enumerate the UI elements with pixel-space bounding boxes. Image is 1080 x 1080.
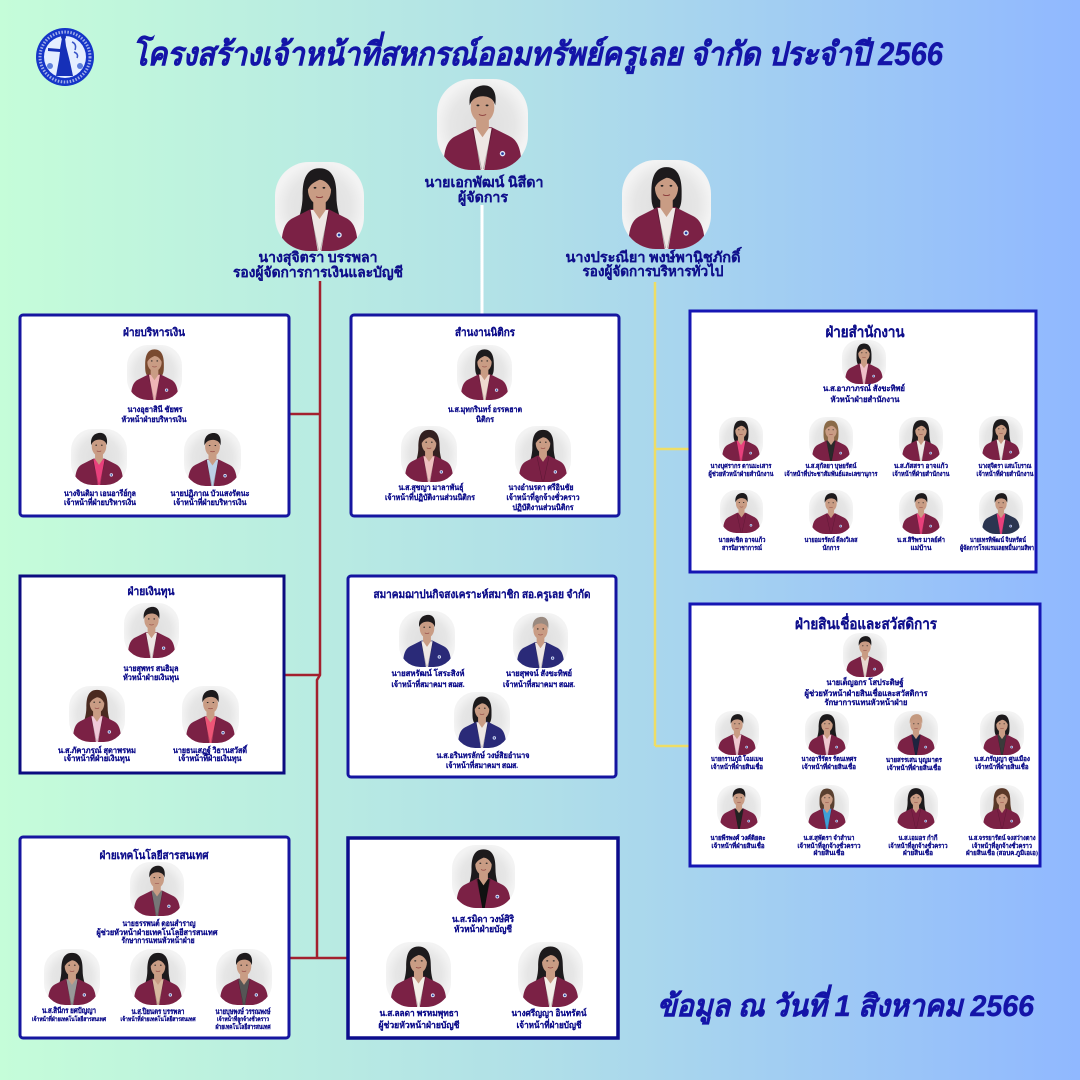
role: office head: หัวหน้าฝ่ายสำนักงาน [830, 394, 900, 404]
name and role: credit staff 7: น.ส.เอมอร กำกี [898, 834, 938, 842]
name and role: office staff 5: สารนิยาชาการณ์ [722, 544, 762, 552]
panel: legal office [351, 315, 619, 516]
name and role: credit staff 7: เจ้าหน้าที่ลูกจ้างชั่วคราว [888, 840, 948, 851]
date note: ข้อมูล ณ วันที่ 1 สิงหาคม 2566 [657, 984, 1034, 1025]
name and role: office staff 1 [708, 463, 774, 479]
portrait: credit staff 7 [894, 785, 938, 829]
person: deputy manager general administration: นางประณียา พงษ์พานิชภักดิ์ [566, 246, 742, 266]
name and role: credit staff 6: ฝ่ายสินเชื่อ [814, 847, 845, 857]
portrait: deputy finance [275, 162, 364, 251]
connector: general administration lines [655, 282, 689, 746]
heading: investment: ฝ่ายเงินทุน [128, 585, 175, 599]
name and role: credit staff 7 [888, 834, 948, 857]
role: accounting head: หัวหน้าฝ่ายบัญชี [454, 924, 512, 935]
portrait: association staff 1 [399, 611, 455, 667]
name and role: credit staff 4: เจ้าหน้าที่ฝ่ายสินเชื่อ [976, 761, 1029, 771]
name and role: office staff 6: นายอมรรัตน์ ดีลงวิเลส [804, 536, 858, 544]
name and role: credit staff 3 [886, 757, 942, 772]
heading: information technology: ฝ่ายเทคโนโลยีสารสนเทศ [100, 848, 209, 862]
portrait: office staff 6 [809, 490, 853, 534]
name and role: credit staff 2: นางอารีรัตร รัตนเทศร [802, 755, 857, 763]
name: investment staff 1: น.ส.ภัคาภรณ์ สุดาพรหม [58, 745, 136, 756]
portrait: credit staff 1 [715, 711, 759, 755]
heading: legal office: สำนงานนิติกร [455, 326, 515, 339]
portrait: legal staff 1 [401, 426, 457, 482]
heading: association: สมาคมฌาปนกิจสงเคราะห์สมาชิก สอ.ครูเลย จำกัด [374, 588, 590, 602]
portrait: legal staff 2 [515, 426, 571, 482]
name and role: office staff 8: ผู้จัดการโรงแรมเลยหมื่นงามสิทา [960, 542, 1034, 553]
portrait: credit staff 2 [805, 711, 849, 755]
heading: credit and welfare: ฝ่ายสินเชื่อและสวัสดิการ [795, 613, 938, 633]
name: association staff 2: นายสุพจน์ สังขะทิพย์ [506, 668, 572, 679]
portrait: office staff 1 [719, 417, 763, 461]
role: association staff 2: เจ้าหน้าที่สมาคมฯ สฌส. [503, 678, 575, 689]
role: treasury head: หัวหน้าฝ่ายบริหารเงิน [122, 414, 187, 424]
name: credit head: นายเด็ญอกร โสประดิษฐ์ [826, 676, 904, 688]
connector: finance and accounting lines [285, 281, 347, 958]
portrait: office head [842, 340, 886, 384]
panel: accounting department [348, 838, 618, 1038]
name and role: credit staff 8: เจ้าหน้าที่ลูกจ้างชั่วคราว [972, 840, 1032, 851]
role: treasury staff 2: เจ้าหน้าที่ฝ่ายบริหารเงิน [174, 496, 247, 507]
portrait: IT head [130, 862, 184, 916]
name and role: office staff 2: เจ้าหน้าที่ประชาสัมพันธ์และเลขานุการ [784, 468, 878, 478]
name: legal staff 2: นางอำนรดา ศรีอินชัย [508, 482, 574, 492]
name and role: office staff 7 [897, 536, 945, 552]
name: legal staff 1: น.ส.สุชญา มาลาพันธุ์ [398, 482, 464, 493]
name and role: office staff 2 [784, 462, 878, 478]
portrait: association staff 3 [454, 692, 510, 748]
portrait: credit staff 5 [717, 785, 761, 829]
person: manager [424, 79, 544, 206]
role: credit head: ผู้ช่วยหัวหน้าฝ่ายสินเชื่อและสวัสดิการ [804, 687, 928, 699]
portrait: office staff 7 [899, 490, 943, 534]
person: deputy manager finance: รองผู้จัดการการเงินและบัญชี [233, 265, 403, 281]
portrait: IT staff 1 [44, 949, 100, 1005]
name and role: credit staff 6: เจ้าหน้าที่ลูกจ้างชั่วคราว [798, 840, 861, 851]
name: office head: น.ส.อาภาภรณ์ สังขะทิพย์ [823, 383, 905, 393]
portrait: credit staff 3 [894, 711, 938, 755]
title: โครงสร้างเจ้าหน้าที่สหกรณ์ออมทรัพย์ครูเลย จำกัด ประจำปี 2566 [132, 31, 943, 74]
name: IT staff 3: นายบุษพงษ์ วรรณพงษ์ [216, 1007, 271, 1016]
role: legal staff 2: เจ้าหน้าที่ลูกจ้างชั่วคราว [506, 491, 580, 503]
name and role: credit staff 8 [966, 834, 1038, 858]
role note: IT staff 3: ฝ่ายเทคโนโลยีสารสนเทศ [216, 1022, 271, 1031]
portrait: legal head [457, 345, 512, 400]
name and role: office staff 3: น.ส.ภัสสรา อาจแก้ว [894, 461, 948, 470]
portrait: credit staff 4 [980, 711, 1024, 755]
name and role: credit staff 4 [974, 755, 1030, 771]
name and role: credit staff 3: เจ้าหน้าที่ฝ่ายสินเชื่อ [887, 762, 941, 772]
name and role: office staff 5 [718, 535, 766, 552]
name and role: office staff 8 [960, 536, 1034, 553]
name: investment head: นายสุพทร สนธิมุล [124, 664, 179, 674]
role: IT head: ผู้ช่วยหัวหน้าฝ่ายเทคโนโลยีสารสนเทศ [96, 927, 218, 938]
name: IT head: นายธรรพนต์ ดอนสำราญ [122, 918, 196, 929]
name: investment staff 2: นายธนเสฏฐ์ วิธานสวัสดิ์ [173, 744, 248, 756]
name: association staff 1: นายสหรัฒน์ โสระสิงห์ [392, 668, 464, 678]
portrait: investment staff 1 [69, 686, 125, 742]
name and role: office staff 3: เจ้าหน้าที่ฝ่ายสำนักงาน [892, 468, 950, 478]
name and role: office staff 4: นางสุจิตรา แสนโบราณ [978, 461, 1032, 470]
portrait: deputy administration [622, 160, 711, 249]
role: treasury staff 1: เจ้าหน้าที่ฝ่ายบริหารเงิน [64, 496, 136, 507]
portrait: office staff 2 [809, 417, 853, 461]
portrait: investment staff 2 [182, 686, 239, 743]
name and role: office staff 7: น.ส.สิริพร มาลย์คำ [897, 536, 945, 544]
name: association staff 3: น.ส.อรินทรลักษ์ วงษ์สิยอำนาจ [436, 750, 530, 760]
name and role: credit staff 8: ฝ่ายสินเชื่อ (สอบค.ภูมิเอเอ) [966, 847, 1038, 858]
name and role: credit staff 5: เจ้าหน้าที่ฝ่ายสินเชื่อ [712, 840, 765, 850]
name and role: office staff 1: ผู้ช่วยหัวหน้าฝ่ายสำนักงาน [708, 469, 774, 479]
role: accounting staff 2: เจ้าหน้าที่ฝ่ายบัญชี [516, 1018, 582, 1031]
person: manager: นายเอกพัฒน์ นิสีดา [424, 174, 544, 191]
name and role: office staff 8: นายเทรทิพัฒน์ จินทรัตน์ [970, 536, 1026, 544]
portrait: IT staff 3 [216, 949, 272, 1005]
name and role: credit staff 4: น.ส.ภรัญญา ศูนเมือง [974, 755, 1030, 764]
connector: manager line [480, 205, 484, 314]
role: legal head: นิติกร [476, 415, 495, 424]
name: treasury staff 1: นางจินดิมา เอนอารีย์กุล [64, 488, 136, 499]
name and role: office staff 6 [804, 536, 858, 552]
portrait: credit staff 6 [805, 785, 849, 829]
role: investment staff 1: เจ้าหน้าที่ฝ่ายเงินทุน [64, 752, 131, 764]
portrait: treasury head [127, 345, 182, 400]
heading: office department: ฝ่ายสำนักงาน [826, 324, 905, 341]
panel: office department [690, 311, 1036, 572]
name: accounting staff 1: น.ส.ลลดา พรหมพุทธา [380, 1008, 458, 1019]
portrait: accounting staff 1 [386, 942, 451, 1007]
name and role: credit staff 6 [798, 834, 861, 857]
portrait: manager [437, 79, 528, 170]
name and role: credit staff 7: ฝ่ายสินเชื่อ [903, 847, 933, 857]
name and role: office staff 3 [892, 461, 950, 478]
name and role: credit staff 1: นายกรานภูมิ โฉมเมฆ [711, 754, 763, 764]
name and role: office staff 4 [976, 461, 1034, 478]
name and role: credit staff 5: นายพีรพงศ์ วงศ์ติยตะ [710, 834, 766, 842]
name and role: credit staff 6: น.ส.สุพัตรา จำสำนา [804, 834, 855, 842]
name: IT staff 2: น.ส.ปิยนตร บรรพลา [132, 1007, 184, 1016]
name: treasury staff 2: นายปฏิภาณ บัวแสงรัตนะ [170, 489, 250, 498]
portrait: office staff 3 [899, 417, 943, 461]
name: legal head: น.ส.มุทกรินทร์ อรรคฮาต [448, 404, 522, 415]
role: investment staff 2: เจ้าหน้าที่ฝ่ายเงินทุน [178, 752, 242, 764]
portrait: credit head [843, 633, 887, 677]
name and role: office staff 4: เจ้าหน้าที่ฝ่ายสำนักงาน [976, 468, 1034, 478]
portrait: association staff 2 [513, 613, 568, 668]
name and role: office staff 7: แม่บ้าน [910, 543, 932, 552]
name: treasury head: นางอุธาสินี ชัยพร [128, 404, 183, 415]
role: legal staff 1: เจ้าหน้าที่ปฏิบัติงานส่วนนิติกร [385, 491, 476, 502]
name and role: credit staff 1 [711, 754, 763, 771]
name: accounting head: น.ส.รมิดา วงษ์ศิริ [452, 913, 514, 924]
portrait: office staff 4 [979, 416, 1023, 460]
role: association staff 3: เจ้าหน้าที่สมาคมฯ สฌส. [446, 759, 518, 770]
name and role: credit staff 1: เจ้าหน้าที่ฝ่ายสินเชื่อ [711, 761, 763, 771]
person: deputy manager finance [233, 162, 403, 281]
portrait: investment head [124, 603, 179, 658]
role: IT staff 2: เจ้าหน้าที่ฝ่ายเทคโนโลยีสารสนเทศ [120, 1014, 196, 1023]
role: accounting staff 1: ผู้ช่วยหัวหน้าฝ่ายบัญชี [378, 1020, 460, 1031]
role note: credit head: รักษาการแทนหัวหน้าฝ่าย [824, 697, 908, 707]
portrait: IT staff 2 [130, 949, 186, 1005]
portrait: office staff 5 [720, 490, 763, 533]
portrait: treasury staff 2 [184, 429, 241, 486]
role: association staff 1: เจ้าหน้าที่สมาคมฯ สฌส. [392, 678, 464, 689]
portrait: accounting head [452, 845, 515, 908]
portrait: treasury staff 1 [71, 429, 127, 485]
heading: treasury: ฝ่ายบริหารเงิน [123, 326, 185, 339]
name and role: office staff 1: นางบุศรากร ตานมะเสาร [710, 463, 772, 470]
person: deputy manager general administration [566, 160, 742, 280]
name and role: credit staff 5 [710, 834, 766, 850]
panel: credit and welfare department [690, 604, 1040, 866]
logo [36, 28, 94, 86]
name and role: office staff 2: น.ส.สุกัลยา บุษยรัตน์ [806, 462, 857, 470]
panel: information technology department [20, 837, 289, 1038]
name and role: credit staff 2: เจ้าหน้าที่ฝ่ายสินเชื่อ [802, 761, 856, 771]
person: deputy manager finance: นางสุจิตรา บรรพลา [258, 250, 378, 266]
portrait: accounting staff 2 [518, 942, 583, 1007]
portrait: credit staff 8 [980, 785, 1024, 829]
person: manager: ผู้จัดการ [458, 190, 508, 206]
name and role: office staff 6: นักการ [822, 544, 840, 552]
role: IT staff 3: เจ้าหน้าที่ลูกจ้างชั่วคราว [217, 1014, 270, 1024]
panel: investment department [20, 576, 284, 773]
portrait: office staff 8 [979, 490, 1023, 534]
panel: funeral welfare association [348, 576, 616, 777]
name and role: credit staff 3: นายสรรเสน บุญมาตร [886, 757, 942, 764]
panel: treasury department [20, 315, 289, 516]
role: investment head: หัวหน้าฝ่ายเงินทุน [123, 672, 179, 683]
role note: legal staff 2: ปฏิบัติงานส่วนนิติกร [512, 503, 574, 512]
name and role: office staff 5: นายคเชิด อาจแก้ว [718, 535, 766, 544]
role: IT staff 1: เจ้าหน้าที่ฝ่ายเทคโนโลยีสารสนเทศ [32, 1014, 106, 1023]
name: accounting staff 2: นางศรีญญา อินทรัตน์ [512, 1007, 587, 1019]
role note: IT head: รักษาการแทนหัวหน้าฝ่าย [122, 935, 195, 945]
name and role: credit staff 2 [802, 755, 857, 771]
name: IT staff 1: น.ส.สินีกร ยศปัญญา [42, 1006, 96, 1015]
name and role: credit staff 8: น.ส.จรรยารัตน์ จงสว่างตาง [968, 834, 1036, 842]
person: deputy manager general administration: รองผู้จัดการบริหารทั่วไป [582, 261, 724, 280]
